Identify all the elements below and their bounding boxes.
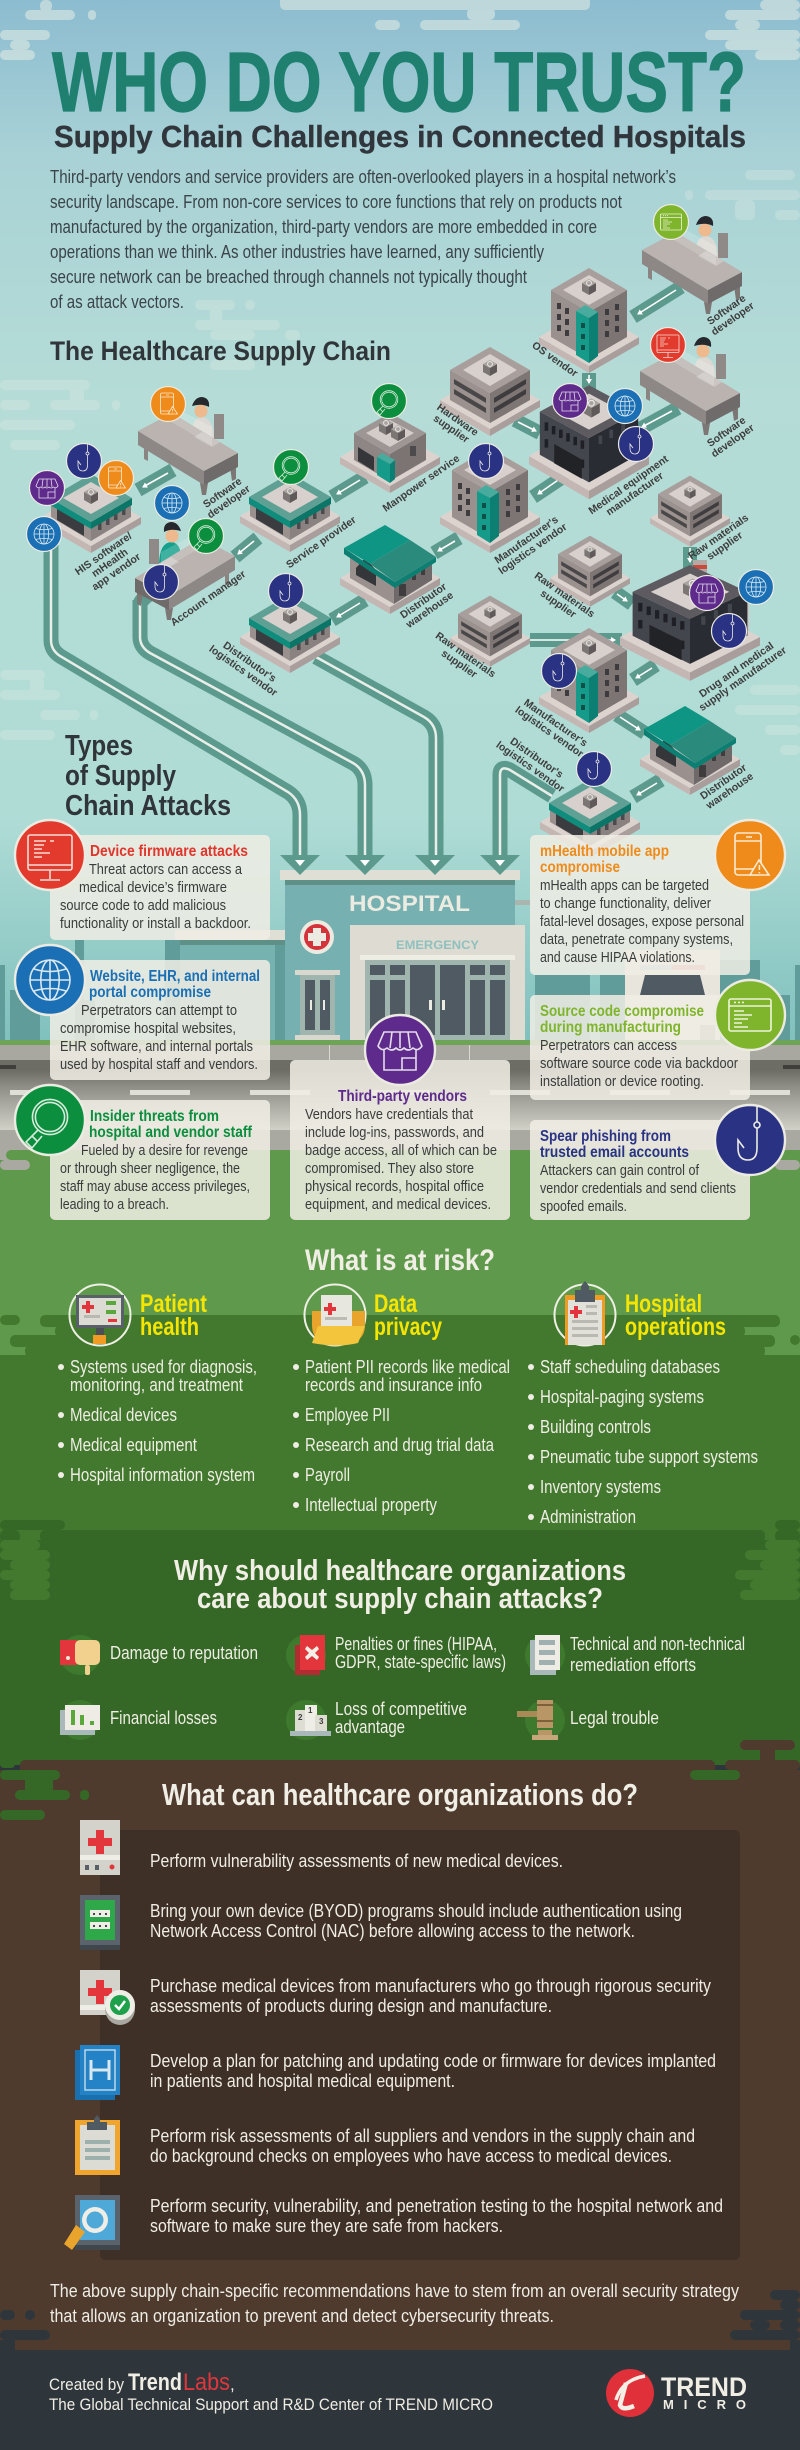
- card: mHealth compromise: data, penetrate company systems,: [540, 932, 733, 948]
- item: remediation efforts: remediation efforts: [570, 1655, 696, 1675]
- card: third-party vendors: compromised. They also store: [305, 1161, 474, 1177]
- node: raw materials supplier top: supplier: [705, 529, 745, 563]
- node: distributor warehouse: Distributor: [398, 581, 449, 621]
- list: hospital operations: Staff scheduling databases: [540, 1357, 720, 1377]
- list: patient health: Medical equipment: [70, 1435, 197, 1455]
- pipes to hospital: [51, 545, 552, 862]
- list: data privacy: Payroll: [305, 1465, 350, 1485]
- intro paragraph: operations than we think. As other industries have learned, any sufficiently: [50, 242, 544, 262]
- heading: patient health: Patient: [140, 1290, 208, 1318]
- item: penalties or fines: GDPR, state-specific laws): [335, 1652, 506, 1672]
- heading: what is at risk: What is at risk?: [305, 1244, 495, 1277]
- node: software developer middle right: [640, 328, 757, 460]
- list: hospital operations: Hospital-paging systems: [540, 1387, 704, 1407]
- node: software developer top right: [642, 204, 757, 338]
- card: third-party vendors: Vendors have credentials that: [305, 1107, 473, 1123]
- pipe bands: [51, 545, 552, 858]
- action 5: do background checks on employees who have access to medical devices.: [150, 2146, 672, 2166]
- road and ground: [0, 1040, 800, 1150]
- node: manufacturer's logistics vendor: logistics vendor: [496, 521, 569, 577]
- heading: patient health: [140, 1290, 208, 1341]
- footer credit: Labs: [183, 2369, 230, 2396]
- intro paragraph: secure network can be breached through channels not typically thought: [50, 267, 527, 287]
- action 2: Network Access Control (NAC) before allowing access to the network.: [150, 1921, 635, 1941]
- card: device firmware attacks: Device firmware attacks: [90, 843, 248, 860]
- node: distributor's logistics vendor: logistics vendor: [207, 643, 280, 699]
- node: distributor warehouse: warehouse: [403, 589, 456, 631]
- card: spear phishing: Attackers can gain control of: [540, 1163, 700, 1179]
- lower sky clouds: [0, 170, 800, 755]
- list: hospital operations: Pneumatic tube support systems: [540, 1447, 758, 1467]
- card: mHealth compromise: [530, 820, 785, 975]
- action 4: [75, 2045, 716, 2100]
- upper sky clouds: [0, 0, 800, 60]
- side door: [295, 970, 340, 1040]
- heading: patient health: health: [140, 1313, 199, 1341]
- node: raw materials supplier top: [650, 476, 757, 571]
- closing statement: that allows an organization to prevent and detect cybersecurity threats.: [50, 2306, 554, 2326]
- card: insider threats: Fueled by a desire for revenge: [81, 1143, 248, 1159]
- node: service provider: Service provider: [284, 514, 358, 571]
- heading: hospital operations: operations: [625, 1313, 726, 1341]
- node: manufacturer's logistics vendor lower: logistics vendor: [513, 704, 586, 760]
- card: source code compromise: installation or device rooting.: [540, 1074, 704, 1090]
- card: mHealth compromise: mHealth mobile app: [540, 843, 669, 860]
- card: device firmware attacks: Threat actors can access a: [89, 862, 243, 878]
- card: source code compromise: Perpetrators can access: [540, 1038, 677, 1054]
- heading: hospital operations: [625, 1290, 726, 1341]
- card: insider threats: hospital and vendor staff: [89, 1124, 253, 1141]
- column: hospital operations: [528, 1281, 758, 1527]
- action 1: Perform vulnerability assessments of new medical devices.: [150, 1851, 563, 1871]
- node: service provider: [240, 450, 358, 571]
- list: patient health: [58, 1357, 257, 1485]
- node: HIS vendor: HIS software/: [73, 530, 134, 578]
- node: hardware supplier: supplier: [431, 412, 471, 446]
- node: manufacturer's logistics vendor: [440, 444, 569, 577]
- card: mHealth compromise: and cause HIPAA violations.: [540, 950, 695, 966]
- node: hardware supplier: Hardware: [434, 401, 481, 439]
- card: spear phishing: spoofed emails.: [540, 1199, 627, 1215]
- node: hardware supplier: [428, 347, 540, 448]
- card: third-party vendors: include log-ins, passwords, and: [305, 1125, 484, 1141]
- footer credit: The Global Technical Support and R&D Center of TREND MICRO: [49, 2395, 493, 2414]
- heading: why should organizations care: Why should healthcare organizations: [174, 1555, 626, 1587]
- chain arrows: [138, 287, 690, 797]
- node: medical equipment manufacturer: Medical equipment: [586, 453, 671, 517]
- node: software developer top right: developer: [709, 300, 757, 338]
- intro paragraph: manufactured by the organization, third-party vendors are more embedded in core: [50, 217, 597, 237]
- node: manufacturer's logistics vendor lower: Manufacturer's: [521, 697, 590, 750]
- list: patient health: Hospital information system: [70, 1465, 255, 1485]
- heading: hospital operations: Hospital: [625, 1290, 702, 1318]
- card: website compromise: EHR software, and internal portals: [60, 1039, 253, 1055]
- node: distributor warehouse lower: Distributor: [698, 762, 749, 802]
- item: legal trouble: [517, 1700, 659, 1740]
- node: medical equipment manufacturer: manufacturer: [604, 470, 666, 518]
- ambulance: [625, 950, 720, 1040]
- card: source code compromise: during manufacturing: [540, 1019, 681, 1036]
- node: distributor warehouse lower: [640, 706, 756, 812]
- list: data privacy: [293, 1357, 510, 1515]
- node: drug and medical supply manufacturer: [620, 560, 789, 714]
- item: penalties or fines: [286, 1634, 506, 1675]
- item: damage to reputation: [60, 1635, 258, 1675]
- node: raw materials supplier lower: [427, 596, 530, 689]
- node: raw materials supplier middle: [526, 536, 630, 629]
- list: patient health: Systems used for diagnosis,: [70, 1357, 257, 1377]
- action 6: [64, 2195, 723, 2250]
- item: loss of competitive advantage: 1: [308, 1706, 313, 1715]
- node: raw materials supplier top: Raw materials: [686, 512, 751, 562]
- action 6: Perform security, vulnerability, and penetration testing to the hospital network and: [150, 2196, 723, 2216]
- subtitle: Supply Chain Challenges in Connected Hospitals: [54, 119, 746, 154]
- node: software developer left: [138, 386, 253, 521]
- logo mark: [606, 2369, 654, 2417]
- node: raw materials supplier lower: supplier: [439, 647, 479, 681]
- hospital sign: HOSPITAL: [349, 891, 470, 916]
- list: data privacy: Patient PII records like medical: [305, 1357, 510, 1377]
- card: insider threats: leading to a breach.: [60, 1197, 169, 1213]
- node: software developer top right: Software: [705, 292, 748, 328]
- heading: types of supply chain attacks: Types: [65, 730, 133, 762]
- list: hospital operations: Building controls: [540, 1417, 651, 1437]
- card: spear phishing: vendor credentials and send clients: [540, 1181, 736, 1197]
- node: software developer left: Software: [201, 475, 244, 511]
- node: OS vendor: OS vendor: [530, 339, 580, 380]
- column: patient health: [58, 1284, 257, 1485]
- list: hospital operations: [528, 1357, 758, 1527]
- heading: types of supply chain attacks: Chain Attacks: [65, 790, 231, 822]
- node: manpower service: [340, 384, 462, 515]
- node: account manager: Account manager: [169, 568, 248, 629]
- card: mHealth compromise: to change functionality, deliver: [540, 896, 711, 912]
- node: raw materials supplier lower: Raw materials: [433, 630, 498, 680]
- icon: clipboard: [554, 1281, 616, 1346]
- heading: types of supply chain attacks: [65, 730, 231, 822]
- item: financial losses: [60, 1700, 217, 1740]
- node: manpower service: Manpower service: [381, 452, 462, 515]
- node: HIS vendor: [26, 444, 147, 596]
- card: website compromise: portal compromise: [89, 984, 211, 1001]
- node: distributor's logistics vendor lower: Distributor's: [508, 735, 565, 781]
- action 1: [80, 1820, 563, 1875]
- emergency wing: EMERGENCY: [396, 938, 479, 952]
- trend micro logo: MICRO: [663, 2397, 746, 2412]
- card: insider threats: [15, 1085, 270, 1220]
- node: manufacturer's logistics vendor lower: [513, 628, 639, 760]
- node: software developer middle right: developer: [709, 422, 757, 460]
- card: device firmware attacks: [15, 820, 270, 940]
- red cross sign: [300, 920, 334, 954]
- item: financial losses: Financial losses: [110, 1708, 217, 1728]
- card: third-party vendors: [290, 1015, 510, 1220]
- intro paragraph: security landscape. From non-core services to core functions that rely on products not: [50, 192, 622, 212]
- card: spear phishing: [530, 1105, 785, 1220]
- list: data privacy: Employee PII: [305, 1405, 390, 1425]
- item: loss of competitive advantage: advantage: [335, 1717, 405, 1737]
- intro paragraph: of as attack vectors.: [50, 292, 184, 312]
- card: third-party vendors: Third-party vendors: [338, 1088, 467, 1105]
- emergency wing: [350, 925, 525, 1040]
- card: third-party vendors: equipment, and medical devices.: [305, 1197, 491, 1213]
- action 3: [80, 1970, 711, 2025]
- footer credit: Created by: [49, 2375, 124, 2394]
- list: patient health: Medical devices: [70, 1405, 177, 1425]
- node: HIS vendor: mHealth: [90, 546, 130, 580]
- action 5: Perform risk assessments of all suppliers and vendors in the supply chain and: [150, 2126, 695, 2146]
- heading: what can organizations do: What can healthcare organizations do?: [162, 1777, 638, 1812]
- list: hospital operations: Administration: [540, 1507, 636, 1527]
- node: raw materials supplier middle: supplier: [538, 587, 578, 621]
- card: third-party vendors: physical records, hospital office: [305, 1179, 484, 1195]
- city skyline: [0, 900, 800, 1040]
- footer credit: [49, 2369, 493, 2414]
- intro paragraph: [50, 167, 676, 312]
- card: source code compromise: [530, 980, 785, 1100]
- closing statement: [50, 2281, 739, 2326]
- hospital facade: [285, 885, 515, 1040]
- heading: types of supply chain attacks: of Supply: [65, 760, 176, 792]
- icon: monitor: [70, 1284, 130, 1346]
- footer credit: Trend: [128, 2369, 182, 2396]
- node: drug and medical supply manufacturer: supply manufacturer: [697, 644, 789, 714]
- card: website compromise: [15, 945, 270, 1080]
- item: loss of competitive advantage: Loss of competitive: [335, 1699, 467, 1719]
- hospital building: [280, 870, 525, 1040]
- card: spear phishing: trusted email accounts: [540, 1144, 689, 1161]
- item: remediation efforts: [525, 1634, 745, 1675]
- card: website compromise: Website, EHR, and internal: [90, 968, 260, 985]
- node: distributor's logistics vendor: [207, 574, 340, 699]
- item: legal trouble: Legal trouble: [570, 1708, 659, 1728]
- trend micro logo: [606, 2369, 747, 2417]
- intro paragraph: Third-party vendors and service providers are often-overlooked players in a hospital network’s: [50, 167, 676, 187]
- action 2: Bring your own device (BYOD) programs should include authentication using: [150, 1901, 682, 1921]
- card: source code compromise: software source code via backdoor: [540, 1056, 738, 1072]
- node: distributor's logistics vendor lower: [494, 730, 640, 858]
- action 5: [75, 2115, 695, 2175]
- column: data privacy: [293, 1284, 510, 1515]
- card: device firmware attacks: medical device’s firmware: [79, 880, 227, 896]
- item: damage to reputation: Damage to reputation: [110, 1643, 258, 1663]
- heading: data privacy: [374, 1290, 442, 1341]
- pipe arrowheads: [280, 855, 520, 875]
- action 3: assessments of products during design and manufacture.: [150, 1996, 552, 2016]
- node: software developer middle right: Software: [705, 414, 748, 450]
- card: device firmware attacks: functionality or install a backdoor.: [60, 916, 251, 932]
- list: data privacy: records and insurance info: [305, 1375, 482, 1395]
- node: distributor's logistics vendor lower: logistics vendor: [494, 739, 567, 795]
- card: spear phishing: Spear phishing from: [540, 1128, 671, 1145]
- action 6: software to make sure they are safe from hackers.: [150, 2216, 503, 2236]
- trend micro logo: TREND: [661, 2372, 747, 2402]
- node: distributor's logistics vendor: Distributor's: [221, 639, 278, 685]
- item: penalties or fines: Penalties or fines (HIPAA,: [335, 1634, 497, 1654]
- card: website compromise: compromise hospital websites,: [60, 1021, 236, 1037]
- card: website compromise: Perpetrators can attempt to: [81, 1003, 237, 1019]
- item: loss of competitive advantage: [286, 1699, 467, 1740]
- card: website compromise: used by hospital staff and vendors.: [60, 1057, 258, 1073]
- item: remediation efforts: Technical and non-technical: [570, 1634, 745, 1654]
- heading: why should organizations care: care about supply chain attacks?: [197, 1583, 603, 1615]
- sky background: [0, 0, 800, 1045]
- list: hospital operations: Inventory systems: [540, 1477, 661, 1497]
- item: loss of competitive advantage: 3: [319, 1717, 324, 1726]
- footer credit: ,: [230, 2375, 235, 2394]
- heading: data privacy: Data: [374, 1290, 418, 1318]
- list: data privacy: Intellectual property: [305, 1495, 437, 1515]
- node: OS vendor: [530, 268, 639, 380]
- closing statement: The above supply chain-specific recommendations have to stem from an overall security strategy: [50, 2281, 739, 2301]
- node: drug and medical supply manufacturer: Drug and medical: [697, 640, 776, 700]
- node: distributor warehouse lower: warehouse: [703, 770, 756, 812]
- card: insider threats: or through sheer negligence, the: [60, 1161, 240, 1177]
- node: medical equipment manufacturer: [529, 384, 677, 526]
- card: insider threats: staff may abuse access privileges,: [60, 1179, 250, 1195]
- card: mHealth compromise: mHealth apps can be targeted: [540, 878, 709, 894]
- action 3: Purchase medical devices from manufacturers who go through rigorous security: [150, 1976, 711, 1996]
- heading: data privacy: privacy: [374, 1313, 442, 1341]
- item: loss of competitive advantage: 2: [298, 1713, 303, 1722]
- heading: why should organizations care: [174, 1555, 626, 1615]
- grass and soil layers: [0, 1150, 800, 2450]
- card: device firmware attacks: source code to add malicious: [60, 898, 226, 914]
- node: software developer left: developer: [205, 483, 253, 521]
- card: third-party vendors: badge access, all of which can be: [305, 1143, 497, 1159]
- icon: folder: [304, 1284, 366, 1346]
- card: mHealth compromise: compromise: [540, 859, 620, 876]
- action 2: [80, 1895, 682, 1950]
- list: patient health: monitoring, and treatment: [70, 1375, 243, 1395]
- card: source code compromise: Source code compromise: [540, 1003, 704, 1020]
- node: manufacturer's logistics vendor: Manufacturer's: [492, 514, 561, 566]
- action 4: Develop a plan for patching and updating code or firmware for devices implanted: [150, 2051, 716, 2071]
- heading: healthcare supply chain: The Healthcare Supply Chain: [50, 336, 391, 366]
- node: distributor warehouse: [340, 525, 456, 631]
- panel: recommendations: [64, 1820, 740, 2260]
- card: insider threats: Insider threats from: [90, 1108, 219, 1125]
- node: raw materials supplier middle: Raw materials: [532, 570, 597, 620]
- action 4: in patients and hospital medical equipment.: [150, 2071, 455, 2091]
- list: data privacy: Research and drug trial data: [305, 1435, 495, 1455]
- node: HIS vendor: app vendor: [90, 551, 143, 593]
- card: mHealth compromise: fatal-level dosages, expose personal: [540, 914, 744, 930]
- node: account manager: [135, 486, 248, 629]
